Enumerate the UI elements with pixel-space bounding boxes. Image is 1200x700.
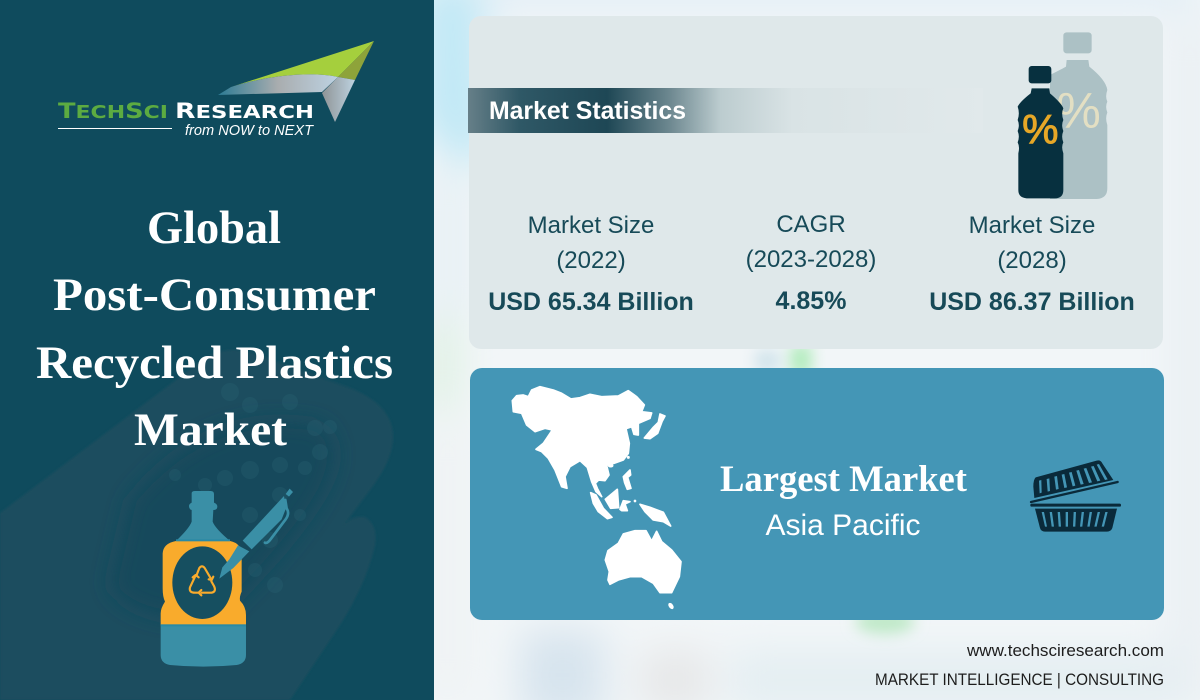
logo wordmark: RESEARCH <box>175 99 314 123</box>
title: Global <box>147 202 281 254</box>
icon: bottles with percent: % <box>1022 107 1058 153</box>
panel: largest market: Asia Pacific <box>765 509 921 542</box>
stat: cagr: CAGR <box>776 211 846 238</box>
stat: market size 2028 <box>929 212 1135 316</box>
footer website: www.techsciresearch.com <box>966 641 1164 660</box>
icon: recycle symbol <box>190 566 215 595</box>
icon: bottles with percent: % <box>1056 83 1101 139</box>
largest market text: Largest Market <box>720 459 968 500</box>
logo tagline: from NOW to NEXT <box>185 122 315 139</box>
stat: market size 2028: USD 86.37 Billion <box>929 288 1135 316</box>
stat: market size 2028: (2028) <box>997 247 1067 274</box>
stat: cagr <box>746 211 876 315</box>
logo wordmark: TECH SCI <box>58 99 168 123</box>
panel: market statistics <box>468 16 1163 349</box>
icon: food container <box>1030 460 1121 532</box>
logo arrow mark <box>218 41 374 122</box>
panel: largest market <box>470 368 1164 620</box>
icon: pen <box>219 489 293 579</box>
heading: market statistics: Market Statistics <box>489 97 686 125</box>
title: Market <box>134 404 287 456</box>
heading: market statistics <box>468 88 983 133</box>
title <box>36 202 393 456</box>
stat: market size 2022: Market Size <box>528 212 654 239</box>
blurred photo background <box>420 0 1200 700</box>
left teal panel <box>0 0 434 700</box>
map: asia pacific <box>512 387 681 609</box>
logo <box>58 41 374 139</box>
plastic pellets <box>169 383 337 593</box>
stat: market size 2022 <box>488 212 694 316</box>
footer tagline: MARKET INTELLIGENCE | CONSULTING <box>875 670 1164 689</box>
stat: market size 2022: USD 65.34 Billion <box>488 288 694 316</box>
icon: bottles with percent <box>1018 32 1107 199</box>
palm shading <box>119 428 327 609</box>
icon: recycled bottle and pen <box>161 489 293 667</box>
stat: market size 2028: Market Size <box>969 212 1095 239</box>
stat: cagr: 4.85% <box>776 287 846 315</box>
stat: cagr: (2023-2028) <box>746 246 876 273</box>
title: Post-Consumer <box>53 269 376 321</box>
stat: market size 2022: (2022) <box>556 247 626 274</box>
logo wordmark <box>58 99 314 123</box>
logo underline <box>58 128 172 129</box>
hand silhouette <box>0 350 393 700</box>
title: Recycled Plastics <box>36 337 393 389</box>
